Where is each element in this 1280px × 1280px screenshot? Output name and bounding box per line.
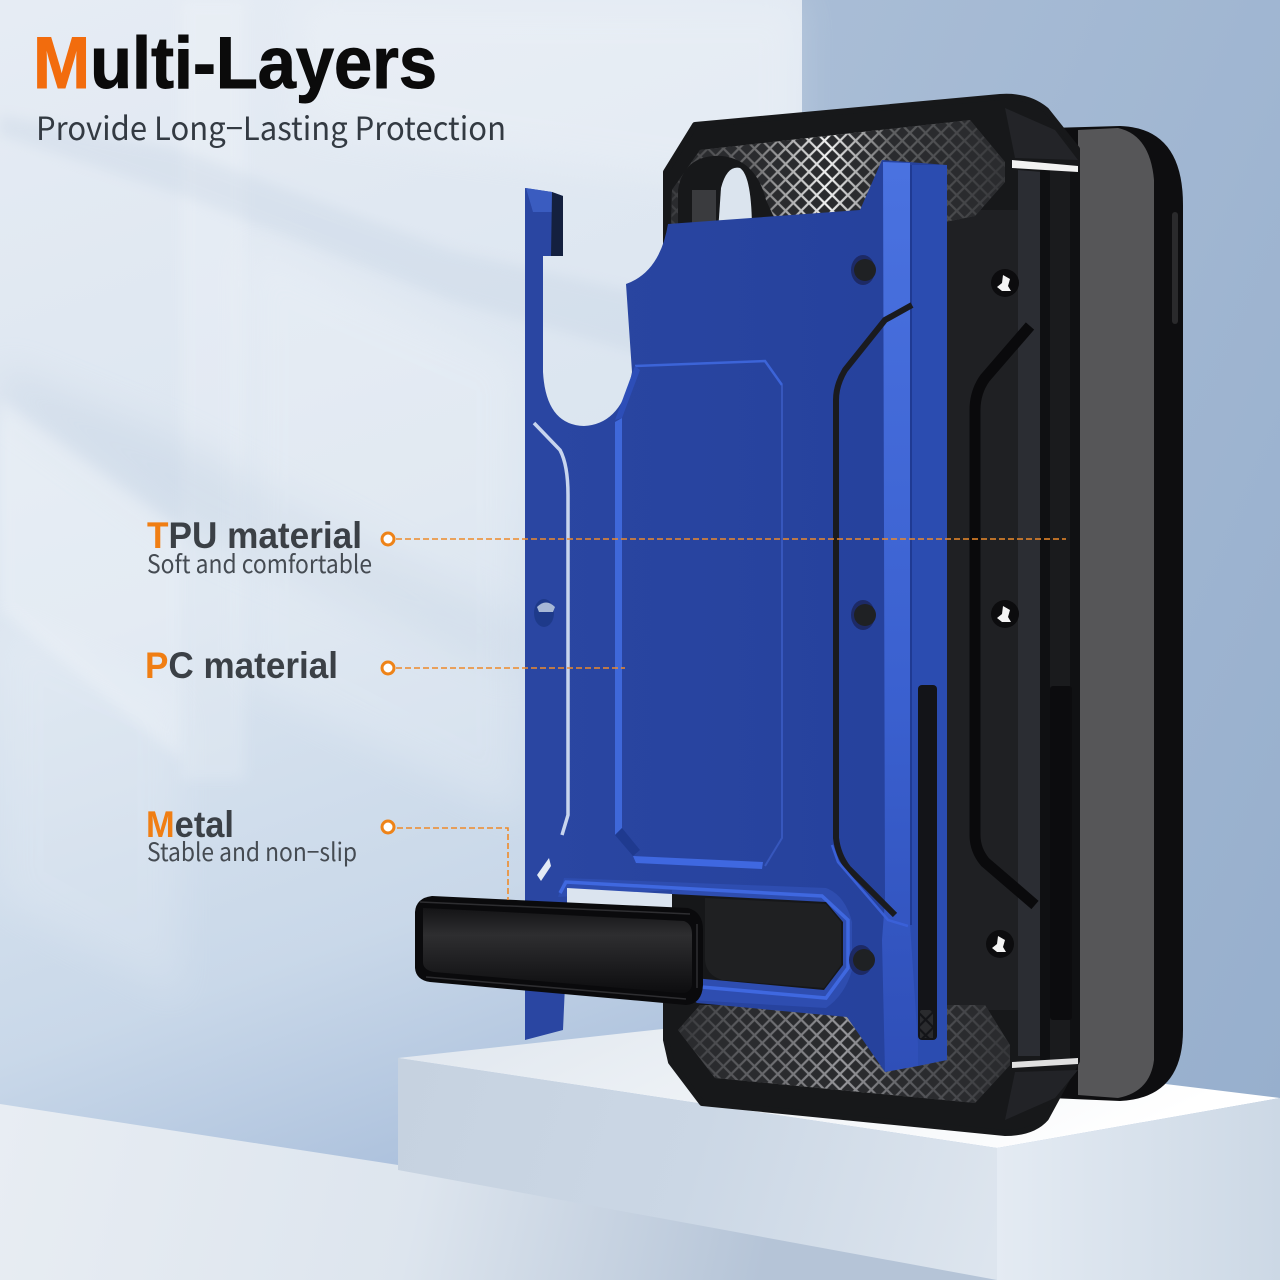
screws [986, 269, 1019, 958]
camera cutout [678, 156, 778, 232]
top bumper mesh [670, 120, 1005, 260]
left tab [551, 192, 563, 256]
window frame and recess [558, 878, 852, 1008]
callout: PC material: PC material [145, 645, 338, 686]
title: Multi-Layers [33, 23, 437, 104]
plate holes [534, 255, 876, 975]
right panel shade [910, 165, 947, 1066]
bottom bumper mesh [678, 1005, 1010, 1103]
curved channel [836, 305, 912, 915]
frame highlights [526, 188, 568, 881]
callout: Metal [146, 804, 508, 900]
PC blue plate [525, 160, 947, 1072]
back phone body [1050, 126, 1183, 1101]
callout: TPU material: Soft and comfortable [147, 545, 372, 581]
callout: PC material [145, 645, 625, 686]
metal kickstand [415, 896, 703, 1005]
subtitle: Provide Long−Lasting Protection [36, 104, 506, 150]
inner grip curve [975, 326, 1035, 905]
callout: Metal: Metal [146, 804, 234, 845]
callout: TPU material [147, 515, 1066, 581]
callout: Metal: Stable and non−slip [147, 833, 357, 869]
bright side strip [882, 162, 918, 1072]
vertical slot [918, 685, 937, 1040]
floor [0, 1104, 997, 1280]
pedestal [398, 1026, 1280, 1280]
raised centre panel [615, 361, 782, 869]
phone layers [415, 97, 1183, 1133]
TPU case [666, 97, 1080, 1133]
silver bands [1012, 160, 1078, 1068]
callout: TPU material: TPU material [147, 515, 362, 556]
